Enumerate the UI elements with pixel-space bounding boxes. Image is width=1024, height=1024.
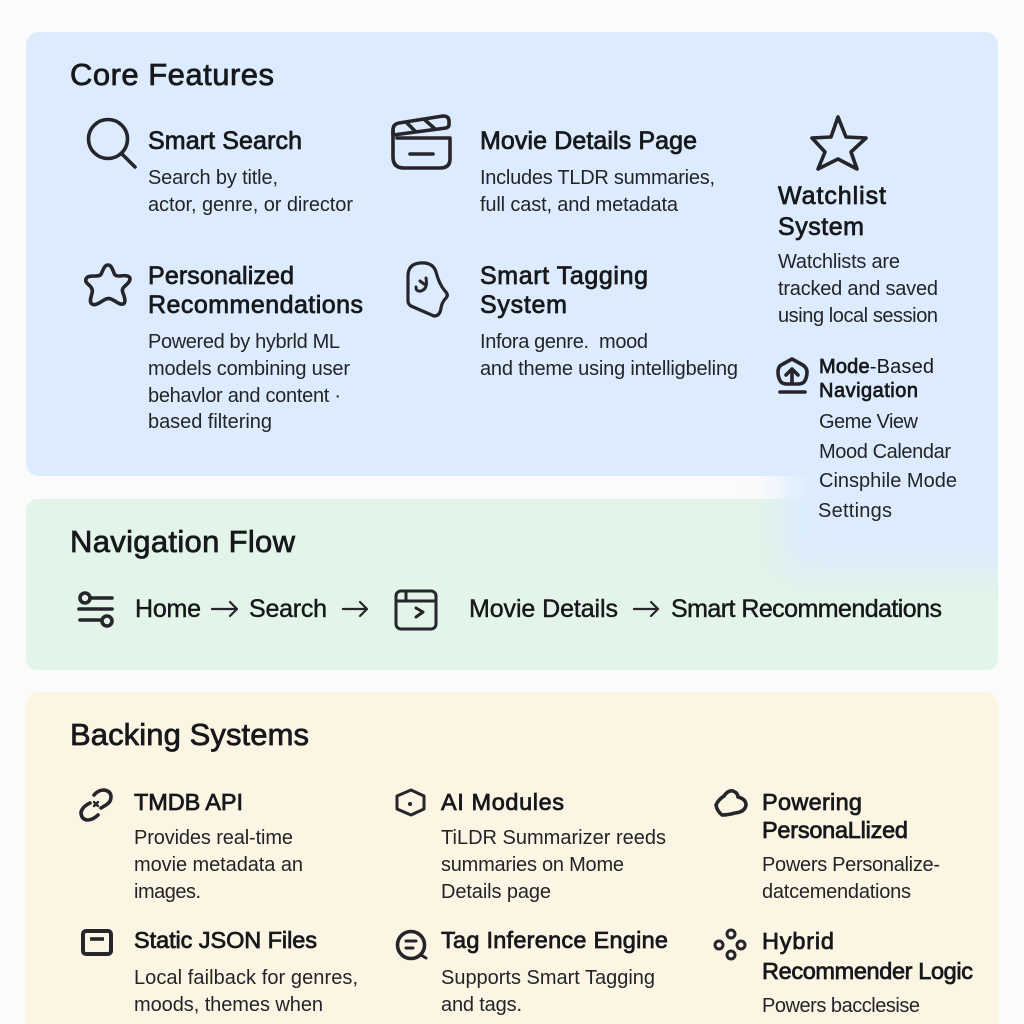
panel: navigation flow background bbox=[26, 499, 998, 670]
smart search description bbox=[148, 167, 353, 216]
tag inference title: Tag Inference Engine bbox=[441, 927, 668, 953]
movie details description: Includes TLDR summaries, bbox=[480, 167, 715, 189]
tmdb api description: Provides real-time bbox=[134, 827, 293, 849]
system: hybrid recommender logic bbox=[715, 928, 973, 1017]
navigation flow steps bbox=[79, 591, 942, 629]
step: movie details: Movie Details bbox=[469, 595, 618, 623]
icon: tag head bbox=[408, 263, 447, 316]
system: tag inference engine bbox=[398, 927, 668, 1016]
powering personalized title: PersonaLlized bbox=[762, 817, 908, 843]
smart search description: actor, genre, or director bbox=[148, 194, 353, 216]
mode list: Cinsphile Mode bbox=[819, 470, 957, 492]
ai modules title: AI Modules bbox=[441, 789, 564, 815]
tag inference description: Supports Smart Tagging bbox=[441, 967, 655, 989]
powering personalized title: Powering bbox=[762, 789, 862, 815]
step: smart recommendations: Smart Recommendations bbox=[671, 595, 942, 623]
watchlist title: System bbox=[778, 213, 864, 241]
watchlist title: Watchlist bbox=[778, 182, 886, 210]
icon: browser window bbox=[396, 591, 436, 629]
icon: four dots bbox=[715, 930, 745, 959]
powering personalized description: datcemendations bbox=[762, 881, 911, 903]
feature: smart tagging system bbox=[408, 262, 738, 380]
personalized recommendations title bbox=[148, 262, 363, 319]
system: ai modules bbox=[397, 789, 666, 903]
personalized recommendations description: models combining user bbox=[148, 358, 350, 380]
icon: outline star bbox=[812, 117, 866, 169]
icon: chat search bbox=[398, 932, 426, 958]
arrow: search to movie details bbox=[343, 602, 367, 616]
panel: blue extension of core features over navigation flow bbox=[770, 466, 998, 580]
hybrid recommender title: Hybrid bbox=[762, 928, 834, 954]
personalized recommendations description: Powered by hybrld ML bbox=[148, 331, 340, 353]
icon: home upload bbox=[778, 359, 807, 392]
ai modules description: summaries on Mome bbox=[441, 854, 624, 876]
icon: file window bbox=[83, 931, 111, 954]
tmdb api description: movie metadata an bbox=[134, 854, 303, 876]
arrow: home to search bbox=[212, 602, 237, 616]
mode-based navigation title: Mode-Based bbox=[819, 356, 934, 378]
system: static json files bbox=[83, 927, 358, 1016]
tmdb api description bbox=[134, 827, 303, 903]
personalized recommendations title: Personalized bbox=[148, 262, 294, 290]
mode list: Mood Calendar bbox=[819, 441, 951, 463]
movie details title: Movie Details Page bbox=[480, 127, 697, 155]
movie details description: full cast, and metadata bbox=[480, 194, 679, 216]
smart search title: Smart Search bbox=[148, 127, 302, 155]
smart tagging description bbox=[480, 331, 738, 380]
movie details description bbox=[480, 167, 715, 216]
static json description: moods, themes when bbox=[134, 994, 323, 1016]
mode list: Settings bbox=[818, 500, 892, 522]
icon: magnifying glass bbox=[88, 120, 135, 167]
mode list bbox=[818, 411, 957, 522]
feature: personalized recommendations bbox=[86, 262, 363, 433]
hybrid recommender description: Powers bacclesise bbox=[762, 995, 920, 1017]
icon: cloud blob bbox=[716, 791, 746, 815]
panel: core features background bbox=[26, 32, 998, 476]
personalized recommendations title: Recommendations bbox=[148, 291, 363, 319]
feature: smart search bbox=[88, 120, 353, 216]
powering personalized title bbox=[762, 789, 908, 843]
watchlist description: Watchlists are bbox=[778, 251, 900, 273]
feature: mode-based navigation bbox=[778, 356, 957, 522]
smart tagging description: Infora genre. mood bbox=[480, 331, 648, 353]
icon: broken link bbox=[81, 790, 111, 820]
tmdb api description: images. bbox=[134, 881, 201, 903]
panel: backing systems background bbox=[26, 692, 998, 1024]
system: powering personalized bbox=[716, 789, 940, 903]
watchlist description: using local session bbox=[778, 305, 938, 327]
watchlist title bbox=[778, 182, 886, 241]
hybrid recommender title: Recommender Logic bbox=[762, 958, 973, 984]
ai modules description bbox=[441, 827, 666, 903]
powering personalized description bbox=[762, 854, 940, 903]
personalized recommendations description bbox=[148, 331, 350, 433]
personalized recommendations description: based filtering bbox=[148, 411, 272, 433]
tag inference description: and tags. bbox=[441, 994, 522, 1016]
system: tmdb api bbox=[81, 789, 303, 903]
hybrid recommender title bbox=[762, 928, 973, 984]
feature: watchlist system bbox=[778, 117, 938, 327]
icon: clapperboard bbox=[393, 116, 450, 168]
mode-based navigation title: Navigation bbox=[819, 380, 918, 402]
tag inference description bbox=[441, 967, 655, 1016]
heading: core features: Core Features bbox=[70, 57, 274, 92]
step: search: Search bbox=[249, 595, 327, 623]
smart tagging title bbox=[480, 262, 648, 319]
icon: rounded star bbox=[86, 265, 130, 305]
ai modules description: Details page bbox=[441, 881, 551, 903]
static json description bbox=[134, 967, 358, 1016]
icon: hexagon bbox=[397, 790, 424, 815]
smart tagging description: and theme using intelligbeling bbox=[480, 358, 738, 380]
arrow: movie details to smart recommendations bbox=[634, 602, 658, 616]
static json description: Local failback for genres, bbox=[134, 967, 358, 989]
ai modules description: TiLDR Summarizer reeds bbox=[441, 827, 666, 849]
smart tagging title: System bbox=[480, 291, 567, 319]
icon: sliders bbox=[79, 593, 112, 626]
step: home: Home bbox=[135, 595, 201, 623]
smart tagging title: Smart Tagging bbox=[480, 262, 648, 290]
heading: navigation flow: Navigation Flow bbox=[70, 524, 296, 559]
powering personalized description: Powers Personalize- bbox=[762, 854, 940, 876]
mode-based navigation title bbox=[819, 356, 934, 402]
static json title: Static JSON Files bbox=[134, 927, 317, 953]
heading: backing systems: Backing Systems bbox=[70, 717, 309, 752]
tmdb api title: TMDB API bbox=[134, 789, 243, 815]
smart search description: Search by title, bbox=[148, 167, 278, 189]
feature: movie details page bbox=[393, 116, 715, 216]
watchlist description: tracked and saved bbox=[778, 278, 938, 300]
personalized recommendations description: behavlor and content · bbox=[148, 385, 341, 407]
watchlist description bbox=[778, 251, 938, 327]
mode list: Geme View bbox=[819, 411, 919, 433]
